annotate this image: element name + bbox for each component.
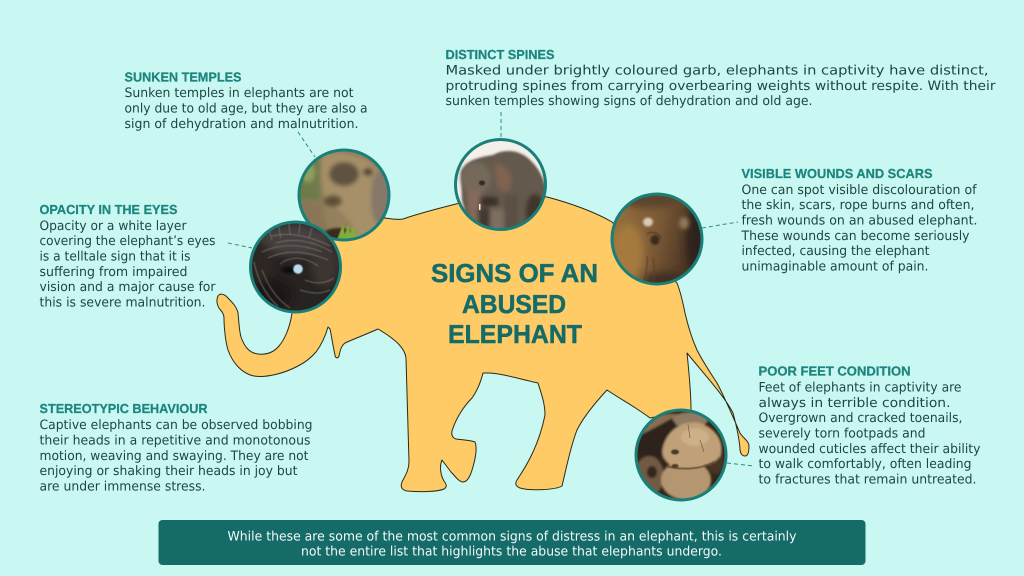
- text block: visible wounds and scars: fresh wounds on an abused elephant.: [742, 214, 978, 228]
- text block: opacity in the eyes: is a telltale sign that it is: [40, 250, 191, 264]
- ring: [612, 194, 702, 284]
- text block: visible wounds and scars: One can spot visible discolouration of: [742, 183, 977, 198]
- text block: sunken temples: SUNKEN TEMPLES: [124, 70, 242, 84]
- text block: poor feet condition: Feet of elephants in captivity are: [758, 380, 962, 396]
- text block: poor feet condition: severely torn footpads and: [758, 426, 926, 442]
- connector: wounds: [702, 222, 738, 228]
- text block: opacity in the eyes: OPACITY IN THE EYES: [40, 202, 178, 217]
- text block: visible wounds and scars: VISIBLE WOUNDS AND SCARS: [742, 166, 933, 181]
- text block: stereotypic behaviour: motion, weaving and swaying. They are not: [40, 449, 308, 464]
- text block: poor feet condition: to walk comfortably, often leading: [758, 457, 972, 472]
- text block: opacity in the eyes: this is severe malnutrition.: [40, 296, 206, 310]
- text block: opacity in the eyes: [40, 202, 216, 310]
- text block: poor feet condition: Overgrown and cracked toenails,: [758, 411, 962, 426]
- photo: visible wounds: [611, 192, 706, 288]
- text block: stereotypic behaviour: [40, 401, 312, 494]
- text block: sunken temples: only due to old age, but they are also a: [124, 102, 368, 116]
- connector: sunken temples: [298, 132, 315, 157]
- text block: sunken temples: [124, 70, 368, 132]
- text block: poor feet condition: wounded cuticles affect their ability: [758, 442, 981, 457]
- text block: stereotypic behaviour: their heads in a repetitive and monotonous: [40, 434, 311, 448]
- text block: sunken temples: sign of dehydration and malnutrition.: [124, 117, 358, 132]
- text block: distinct spines: protruding spines from carrying overbearing weights without respite. With their: [446, 79, 996, 94]
- note banner: [158, 520, 866, 565]
- connector: opacity in the eyes: [228, 243, 252, 248]
- text block: poor feet condition: POOR FEET CONDITION: [758, 364, 910, 378]
- text block: sunken temples: Sunken temples in elephants are not: [124, 86, 354, 101]
- text block: opacity in the eyes: covering the elephant’s eyes: [40, 234, 216, 249]
- ring: [636, 410, 726, 500]
- ring: [456, 140, 546, 230]
- text block: poor feet condition: [758, 364, 981, 488]
- elephant silhouette: [217, 190, 749, 492]
- text block: opacity in the eyes: Opacity or a white layer: [40, 219, 187, 234]
- text block: opacity in the eyes: suffering from impaired: [40, 265, 188, 280]
- photo: distinct spines: [454, 138, 548, 233]
- text block: stereotypic behaviour: enjoying or shaking their heads in joy but: [40, 464, 298, 479]
- text block: distinct spines: [446, 47, 996, 109]
- text block: poor feet condition: always in terrible condition.: [758, 396, 950, 411]
- note banner: While these are some of the most common signs of distress in an elephant, this is certainly: [228, 530, 797, 544]
- text block: opacity in the eyes: vision and a major cause for: [40, 280, 216, 295]
- text block: stereotypic behaviour: Captive elephants can be observed bobbing: [40, 418, 312, 433]
- note banner: not the entire list that highlights the abuse that elephants undergo.: [301, 544, 722, 560]
- text block: distinct spines: DISTINCT SPINES: [446, 47, 555, 62]
- title: ELEPHANT: [448, 319, 582, 349]
- connector: distinct spines: [500, 112, 502, 138]
- text block: visible wounds and scars: infected, causing the elephant: [742, 244, 930, 259]
- connector: feet: [727, 463, 754, 466]
- text block: poor feet condition: to fractures that remain untreated.: [758, 472, 976, 488]
- text block: distinct spines: sunken temples showing signs of dehydration and old age.: [446, 94, 812, 109]
- ring: [299, 150, 389, 240]
- title: [431, 258, 598, 349]
- photo: poor feet: [634, 409, 727, 501]
- text block: visible wounds and scars: [741, 166, 978, 274]
- ring: [250, 222, 340, 312]
- title: ABUSED: [462, 289, 566, 319]
- text block: visible wounds and scars: These wounds can become seriously: [741, 229, 970, 244]
- text block: visible wounds and scars: the skin, scars, rope burns and often,: [742, 198, 974, 213]
- text block: visible wounds and scars: unimaginable amount of pain.: [742, 260, 928, 274]
- photo: sunken temples: [296, 149, 390, 245]
- photo: opacity in the eye: [248, 221, 342, 314]
- text block: distinct spines: Masked under brightly coloured garb, elephants in captivity have distinct,: [446, 64, 988, 78]
- text block: stereotypic behaviour: STEREOTYPIC BEHAVIOUR: [40, 401, 208, 416]
- title: SIGNS OF AN: [431, 258, 598, 288]
- text block: stereotypic behaviour: are under immense stress.: [40, 480, 206, 494]
